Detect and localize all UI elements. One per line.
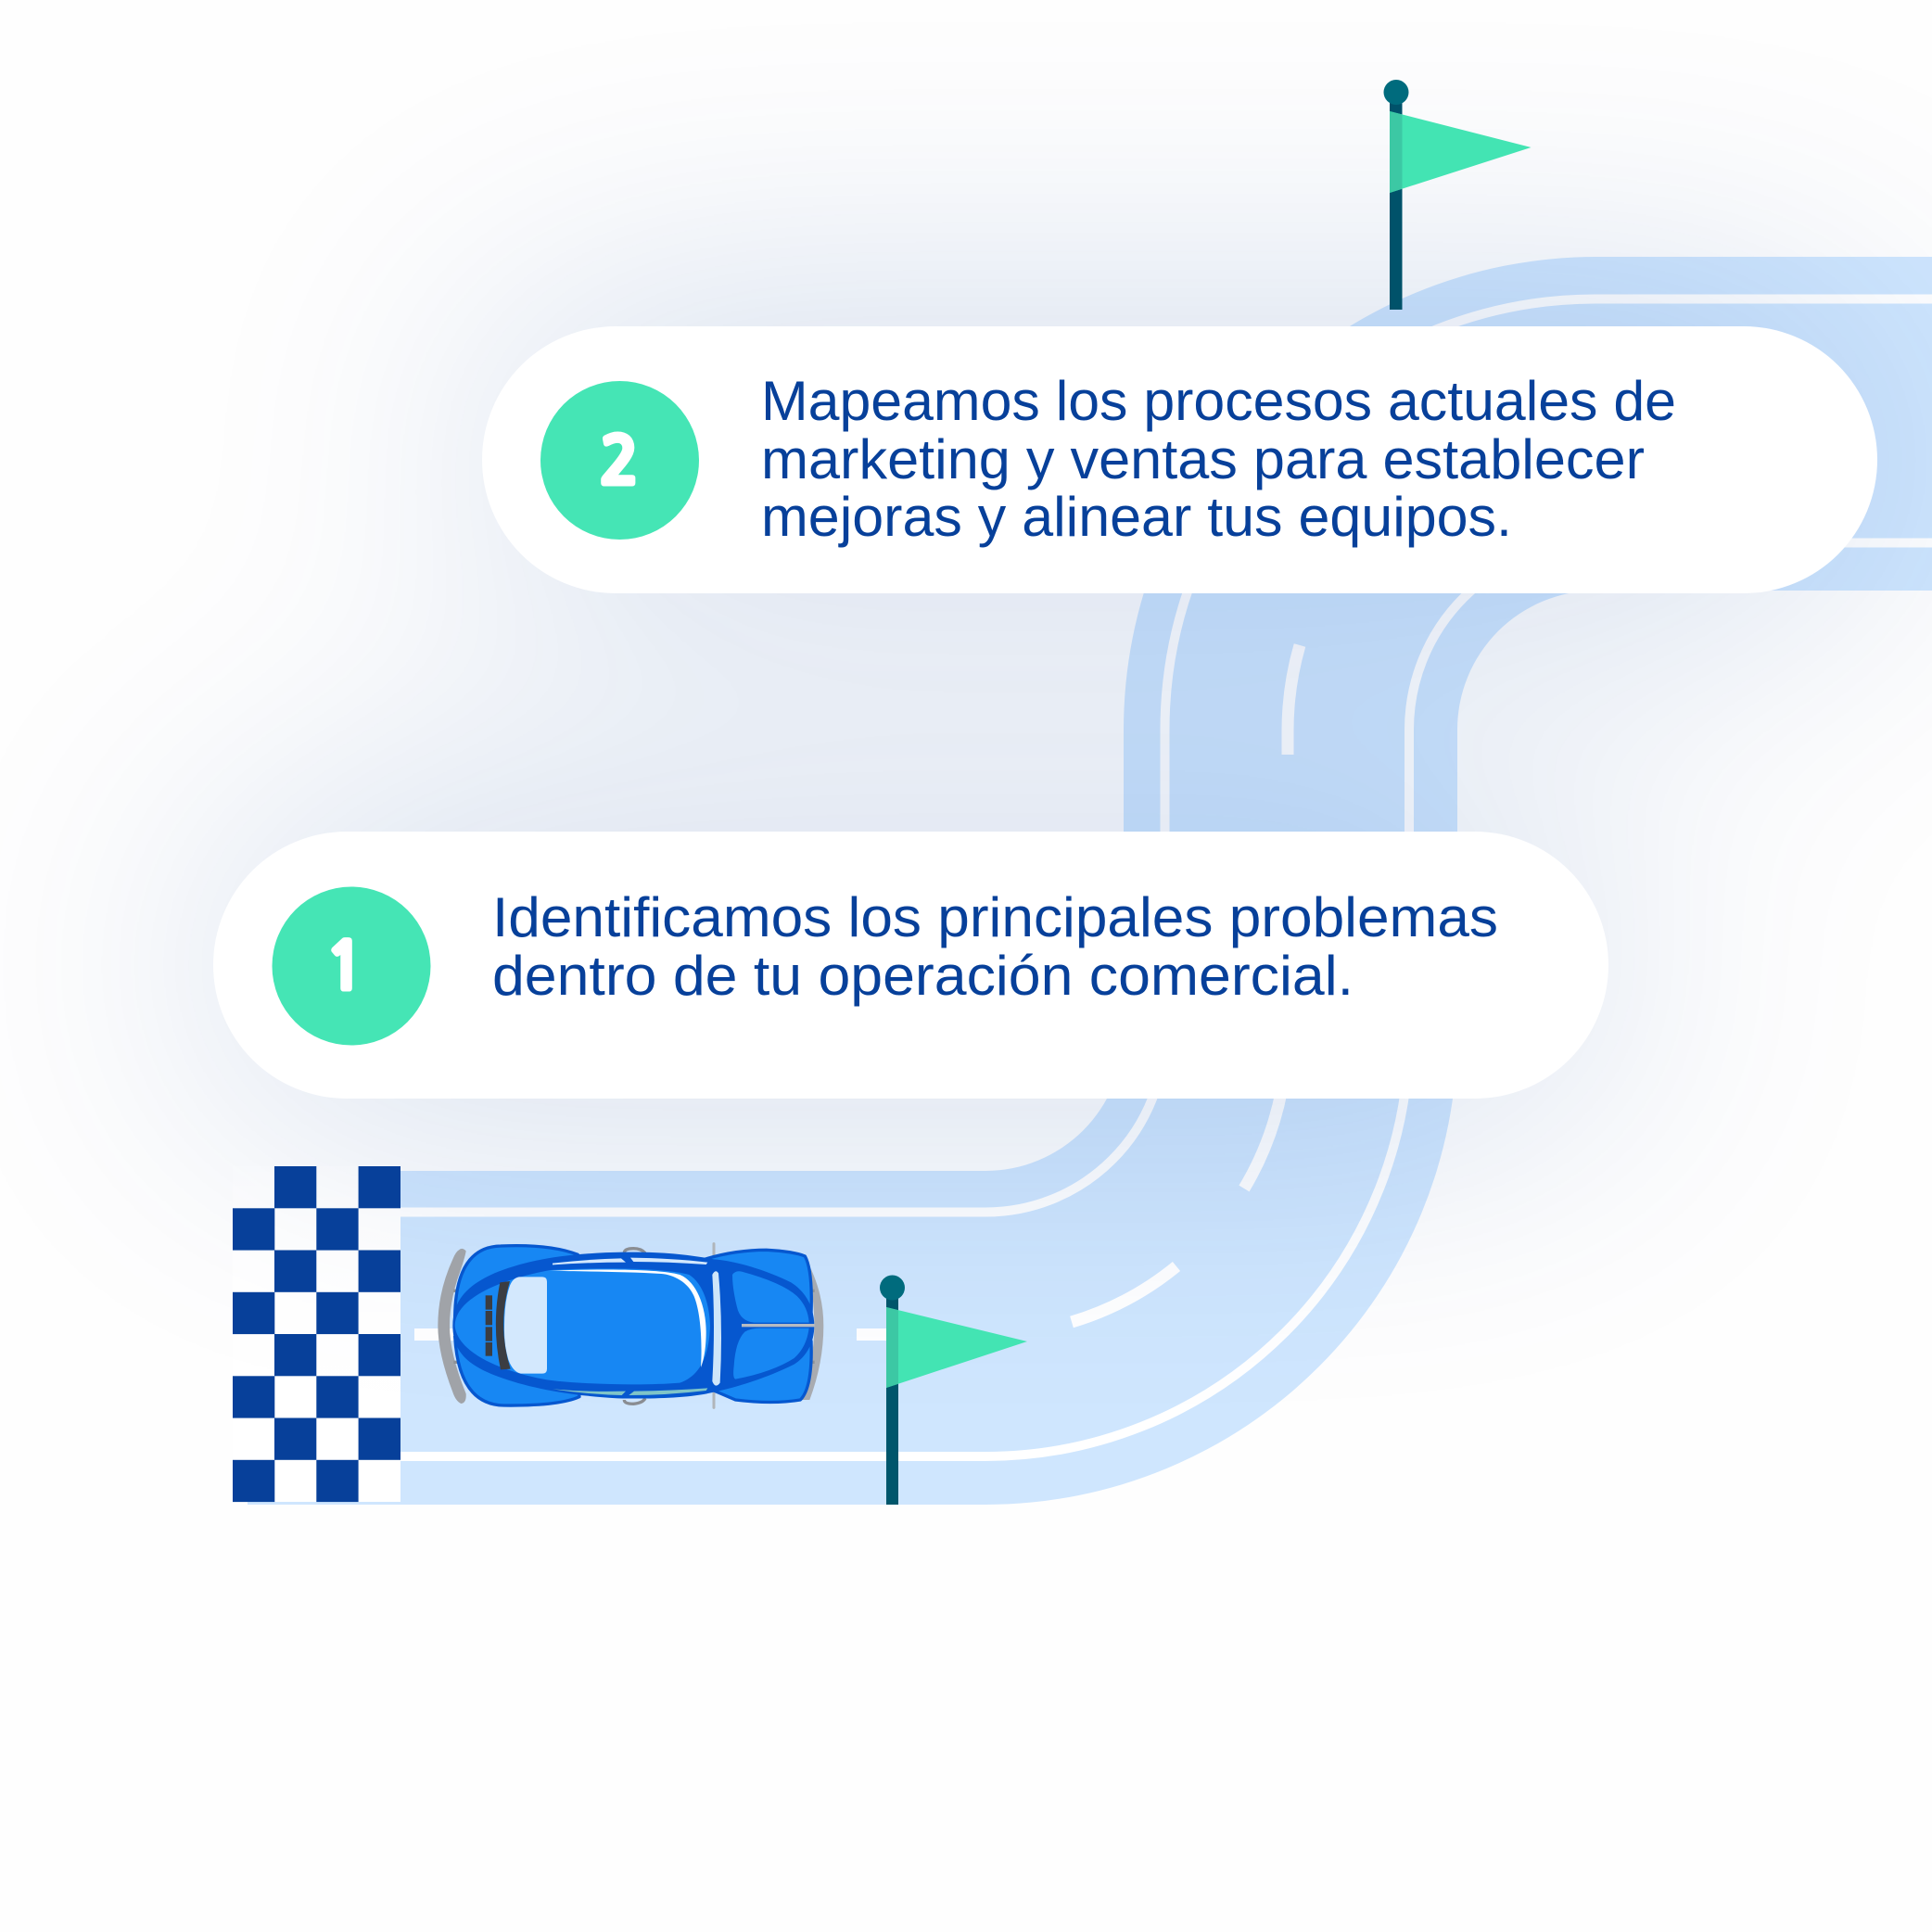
- panel: step 2: [482, 326, 1877, 593]
- text: step 2 description: marketing y ventas para establecer: [761, 428, 1645, 490]
- text: step 1 description: dentro de tu operación comercial.: [492, 945, 1354, 1007]
- badge: number 1: [273, 886, 430, 1046]
- icon: flag 2: [1383, 80, 1532, 310]
- badge: number 2: [540, 381, 699, 540]
- badge: number 2: 2: [600, 430, 639, 493]
- text: step 2 description: Mapeamos los procesos actuales de: [761, 370, 1676, 432]
- text: step 1 description: Identificamos los principales problemas: [492, 886, 1498, 948]
- icon: flag 1: [880, 1276, 1027, 1505]
- text: step 1 description: [492, 886, 1498, 1007]
- icon: blue car: [438, 1244, 823, 1407]
- icon: checkered start line: [233, 1166, 400, 1505]
- text: step 2 description: [761, 370, 1676, 548]
- panel: step 1: [213, 832, 1608, 1099]
- text: step 2 description: mejoras y alinear tus equipos.: [761, 486, 1512, 548]
- badge: number 1: 1: [325, 935, 364, 999]
